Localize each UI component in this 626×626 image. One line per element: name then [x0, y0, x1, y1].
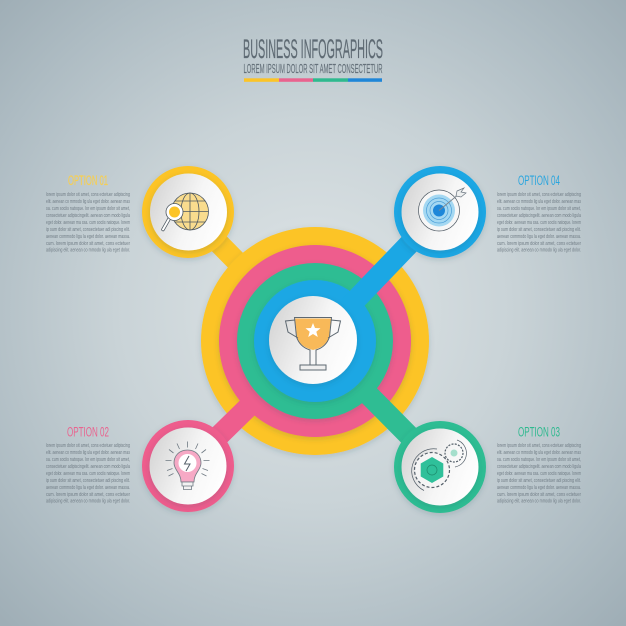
panel: option 04 text [497, 173, 581, 254]
text block: option 04: lorem ipsum dolor sit amet, cons ectetuer adipiscing [497, 192, 581, 198]
text block: option 02: cum. lorem ipsum dolor sit amet, cons ectetuer [46, 492, 130, 498]
text block: option 01 [46, 192, 130, 254]
text block: option 02: sa. cum sociis natoque. lor em ipsum dolor sit amet, [46, 457, 130, 463]
text: LOREM IPSUM DOLOR SIT AMET CONSECTETUR [244, 62, 382, 76]
icon: globe and magnifier [163, 193, 208, 230]
text block: option 02: aenean commodo ligu la eget dolor. aenean massa. [46, 485, 130, 491]
yellow white disc [150, 174, 227, 250]
text block: option 02: lorem ipsum dolor sit amet, cons ectetuer adipiscing [46, 443, 130, 449]
icon: trophy [286, 318, 340, 370]
heading: option 04: OPTION 04 [518, 173, 560, 188]
text block: option 01: lorem ipsum dolor sit amet, cons ectetuer adipiscing [46, 192, 130, 198]
heading: option 03: OPTION 03 [518, 424, 560, 440]
text block: option 04: eget dolor. aenean ma ssa. cum sociis natoque. lorem [497, 220, 581, 226]
text block: option 01: sa. cum sociis natoque. lor em ipsum dolor sit amet, [46, 206, 130, 212]
icon: target with arrow [418, 188, 466, 231]
text block: option 02: elit. aenean co mmodo lig ula eget dolor. aenean mas [46, 450, 130, 456]
text block: option 02: eget dolor. aenean ma ssa. cum sociis natoque. lorem [46, 471, 130, 477]
text block: option 02 [46, 443, 130, 504]
text block: option 04 [497, 192, 581, 254]
center white disc [269, 296, 357, 384]
colour bar [244, 78, 382, 82]
text block: option 01: consectetuer adipiscingelit. aenean com modo ligula [46, 213, 130, 219]
text block: option 01: elit. aenean co mmodo lig ula eget dolor. aenean mas [46, 199, 130, 205]
text block: option 03 [497, 443, 581, 504]
title block [243, 34, 383, 82]
text block: option 03: eget dolor. aenean ma ssa. cum sociis natoque. lorem [497, 471, 581, 477]
text block: option 01: ip sum dolor sit amet, consectetuer adi piscing elit. [46, 227, 130, 233]
text block: option 03: ip sum dolor sit amet, consectetuer adi piscing elit. [497, 478, 581, 484]
pink white disc [150, 428, 226, 504]
panel: option 02 text [46, 424, 130, 504]
text block: option 03: aenean commodo ligu la eget dolor. aenean massa. [497, 485, 581, 491]
text block: option 03: lorem ipsum dolor sit amet, cons ectetuer adipiscing [497, 443, 581, 449]
panel: blue option 04 ring and connector [254, 166, 486, 402]
text block: option 02: consectetuer adipiscingelit. aenean com modo ligula [46, 464, 130, 470]
text block: option 01: adipiscing elit. aenean co mmodo lig ula eget dolor. [46, 248, 130, 254]
panel: option 03 text [497, 424, 581, 504]
icon: light bulb [166, 442, 210, 490]
text block: option 01: eget dolor. aenean ma ssa. cum sociis natoque. lorem [46, 220, 130, 226]
panel: yellow option 01 ring and connector [142, 166, 429, 455]
blue white disc [402, 174, 478, 250]
text block: option 04: aenean commodo ligu la eget dolor. aenean massa. [497, 234, 581, 240]
text block: option 03: elit. aenean co mmodo lig ula eget dolor. aenean mas [497, 450, 581, 456]
panel: option 01 text [46, 173, 130, 254]
panel: green option 03 ring and connector [237, 263, 486, 513]
text block: option 04: elit. aenean co mmodo lig ula eget dolor. aenean mas [497, 199, 581, 205]
text block: option 03: sa. cum sociis natoque. lor em ipsum dolor sit amet, [497, 457, 581, 463]
text block: option 03: adipiscing elit. aenean co mmodo lig ula eget dolor. [497, 498, 581, 504]
text block: option 02: ip sum dolor sit amet, consectetuer adi piscing elit. [46, 478, 130, 484]
text block: option 04: ip sum dolor sit amet, consectetuer adi piscing elit. [497, 227, 581, 233]
text block: option 04: sa. cum sociis natoque. lor em ipsum dolor sit amet, [497, 206, 581, 212]
text block: option 04: adipiscing elit. aenean co mmodo lig ula eget dolor. [497, 248, 581, 254]
icon: gears [412, 440, 466, 490]
text block: option 04: consectetuer adipiscingelit. aenean com modo ligula [497, 213, 581, 219]
text block: option 01: aenean commodo ligu la eget dolor. aenean massa. [46, 234, 130, 240]
text block: option 03: consectetuer adipiscingelit. aenean com modo ligula [497, 464, 581, 470]
heading: option 01: OPTION 01 [68, 173, 108, 188]
text block: option 04: cum. lorem ipsum dolor sit amet, cons ectetuer [497, 241, 581, 247]
panel: pink option 02 ring and connector [142, 245, 411, 512]
text block: option 02: adipiscing elit. aenean co mmodo lig ula eget dolor. [46, 498, 130, 504]
heading: option 02: OPTION 02 [67, 424, 109, 440]
text block: option 03: cum. lorem ipsum dolor sit amet, cons ectetuer [497, 492, 581, 498]
green white disc [402, 428, 478, 506]
text: BUSINESS INFOGRAPHICS [243, 34, 383, 64]
text block: option 01: cum. lorem ipsum dolor sit amet, cons ectetuer [46, 241, 130, 247]
